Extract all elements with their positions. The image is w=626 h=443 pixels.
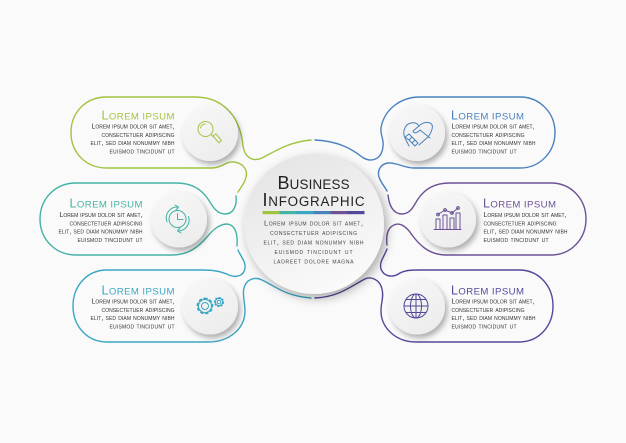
panel: green top-left [90,105,238,161]
center body text: Lorem ipsum dolor sit amet, [264,218,363,228]
body text: elit, sed diam nonummy nibh [90,314,175,322]
center title: INFOGRAPHIC [262,190,365,210]
center body text [264,218,364,266]
connector outline: cyan-blue panel [73,250,311,342]
center body text: consectetuer adipiscing [270,228,357,237]
body text: consectetuer adipiscing [102,306,175,314]
heading: LOREM IPSUM [102,284,174,298]
icon: magnifier [198,122,222,143]
panel: teal middle-left [58,192,207,248]
icon circle [389,105,445,161]
body text: consectetuer adipiscing [452,131,525,139]
body text: Lorem ipsum dolor sit amet, [92,298,175,306]
icon: handshake heart [404,122,432,146]
body text [452,298,536,330]
panel: purple middle-right [420,192,568,248]
icon circle [151,192,207,248]
heading: LOREM IPSUM [483,196,556,210]
connector outline: teal panel [40,183,237,255]
body text: Lorem ipsum dolor sit amet, [452,122,535,130]
body text [58,211,143,244]
icon: gears [197,298,223,313]
connector outline: blue panel [315,97,555,191]
body text: consectetuer adipiscing [452,306,525,314]
body text: euismod tincidunt ut [110,322,174,330]
body text: elit, sed diam nonummy nibh [484,228,568,236]
body text [484,211,568,244]
connector outline: purple panel [387,183,586,255]
heading: LOREM IPSUM [451,108,524,122]
body text: consectetuer adipiscing [102,131,175,139]
body text: Lorem ipsum dolor sit amet, [60,211,143,219]
body text [90,122,175,155]
center body text: elit, sed diam nonummy nibh [264,238,364,246]
center title: BUSINESS [278,173,350,193]
body text [90,298,175,330]
panel: blue bottom-left [90,278,238,334]
heading: LOREM IPSUM [102,108,174,122]
heading: LOREM IPSUM [70,196,142,210]
body text: elit, sed diam nonummy nibh [452,314,536,322]
icon circle [420,192,476,248]
body text [452,122,536,155]
body text: Lorem ipsum dolor sit amet, [452,298,535,306]
icon circle [182,105,238,161]
icon: globe [404,294,428,318]
body text: euismod tincidunt ut [110,147,174,155]
connector outline: green panel [71,97,311,192]
body text: elit, sed diam nonummy nibh [58,228,143,236]
icon circle [389,278,445,334]
body text: euismod tincidunt ut [78,236,142,244]
heading: LOREM IPSUM [451,284,524,298]
body text: elit, sed diam nonummy nibh [90,139,175,147]
connector outline: indigo panel [315,249,553,342]
center title [262,173,365,210]
panel: indigo bottom-right [389,278,536,334]
center body text: laoreet dolore magna [274,256,354,266]
body text: Lorem ipsum dolor sit amet, [484,211,567,219]
body text: consectetuer adipiscing [484,219,557,227]
body text: euismod tincidunt ut [484,236,548,244]
rainbow divider bar [262,211,364,214]
icon: bar chart [434,207,461,230]
body text: Lorem ipsum dolor sit amet, [92,122,175,130]
icon: clock with arrows [166,205,189,233]
body text: euismod tincidunt ut [452,322,516,330]
center body text: euismod tincidunt ut [274,247,352,256]
body text: elit, sed diam nonummy nibh [452,139,536,147]
icon circle [182,278,238,334]
panel: blue top-right [389,105,536,161]
body text: euismod tincidunt ut [452,147,516,155]
body text: consectetuer adipiscing [70,219,143,227]
center circle [244,154,384,294]
